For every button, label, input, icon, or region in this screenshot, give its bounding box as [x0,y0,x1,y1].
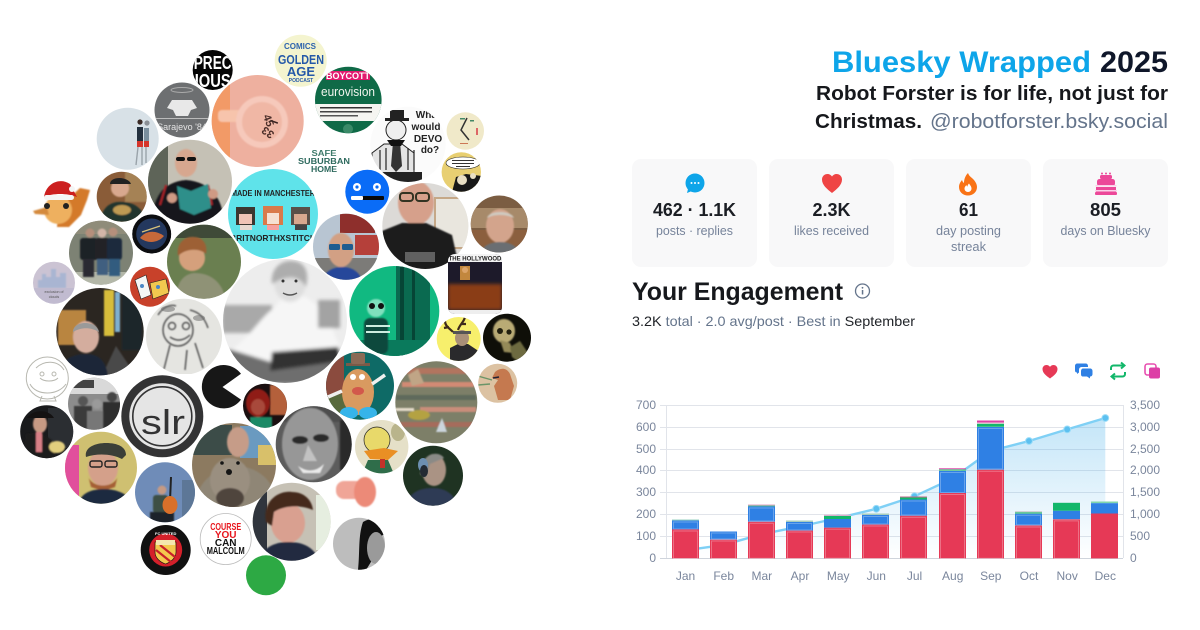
grid lines [660,405,1124,558]
bar May [824,515,851,558]
y axis left: 300 [636,485,656,499]
x axis months [676,569,1116,583]
avatar: pencil caricature [146,298,222,374]
avatar: city poster: clouds [49,295,59,299]
y axis right: 2,500 [1130,442,1160,456]
heading: your engagement: Your Engagement [632,278,844,306]
x axis months: Mar [751,569,772,583]
avatar: red hair selfie [242,383,288,429]
bar Dec [1091,502,1118,558]
avatar: pink peg [336,477,376,507]
avatar: sarajevo [154,82,210,138]
stat card: likes [769,159,894,267]
avatar: made in manchester pixels [226,167,320,261]
avatar: devo illustration [372,110,442,182]
avatar: slr logo [121,375,203,457]
y axis left: 500 [636,442,656,456]
avatar: three people [68,220,134,286]
avatar: green duotone [348,265,442,357]
avatar: sarajevo: Sarajevo '84 [157,122,207,132]
avatar: mission patch [132,214,171,254]
label: safe suburban home: HOME [311,165,338,174]
bar Nov [1053,503,1080,558]
avatar: devo illustration: would [411,122,440,133]
bar Jul [900,496,927,558]
tagline and handle: Christmas. [815,111,922,133]
title: 2025 [1100,46,1168,79]
y axis right: 500 [1130,529,1150,543]
avatar: the hollywood poster [448,254,502,314]
avatar: boy in field [166,224,242,300]
bar Mar [748,504,775,558]
avatar: peach mug: 45 [260,113,276,129]
avatar: blue robot face [345,170,389,214]
bar Jan [672,520,699,558]
avatar: the hollywood poster: THE HOLLYWOOD [449,256,502,262]
y axis right: 2,000 [1130,463,1160,477]
x axis months: Jun [867,569,886,583]
icon: cake [1095,172,1117,195]
stat card: likes: 2.3K [812,200,850,220]
icon: heart [822,174,842,193]
avatar: man with schnauzer [190,422,278,508]
y axis left: 600 [636,420,656,434]
avatar: clock sketch [446,112,484,150]
stat card: likes: likes received [794,224,869,238]
stat card: posts and replies: 462 · 1.1K [653,200,736,220]
stat card: streak [906,159,1031,267]
stat card: days on bluesky [1043,159,1168,267]
y axis left: 700 [636,398,656,412]
avatar: pacman [202,365,241,408]
avatar: comics golden age: AGE [287,64,315,79]
avatar: course you can malcolm: CAN [215,538,237,549]
avatar: black and white profile [332,517,386,571]
avatar: goldfish with santa hat [33,181,90,227]
stat card: posts and replies: posts · replies [656,224,733,238]
avatar: boycott eurovision [314,66,384,134]
avatar: popcorn man [20,405,74,459]
icon: legend quotes [1145,364,1160,378]
avatar: aerial crowd [394,360,478,444]
x axis months: Nov [1057,569,1078,583]
x axis months: Apr [791,569,809,583]
avatar: cartoon cheese [130,266,170,307]
avatar: monkey astronaut line drawing [26,357,68,401]
avatar: made in manchester pixels: BRITNORTHXSTITCH [230,233,316,243]
avatar: course you can malcolm: YOU [215,530,237,541]
label: safe suburban home: SUBURBAN [298,157,350,166]
avatar: course you can malcolm: MALCOLM [207,546,245,557]
avatar: headphones profile [402,445,464,507]
stat card: posts and replies [632,159,757,267]
avatar: precious: PREC [194,53,232,73]
stat card: streak: day posting [936,224,1001,238]
avatar: city poster: exclusion of [45,290,63,294]
bar Sep [977,420,1004,558]
avatar: boycott eurovision: eurovision [321,84,375,99]
avatar: green circle [246,555,286,595]
bar Apr [786,520,813,558]
stat card: days on bluesky: days on Bluesky [1060,224,1151,238]
cumulative area [686,418,1105,558]
avatar: man by bookshelves [470,195,530,254]
avatar: pale couple [96,107,160,171]
y axis left [636,398,656,565]
avatar: comics golden age: COMICS [284,42,317,51]
avatar: devo illustration: What [416,110,441,121]
bars [672,420,1118,558]
avatar: peach mug [210,74,306,168]
avatar: fc united badge: FC UNITED [155,531,176,536]
chart legend [1042,362,1160,380]
icon: legend replies [1075,364,1092,378]
x axis months: May [827,569,850,583]
avatar: smiling old man [274,404,354,484]
x axis months: Feb [713,569,734,583]
avatar: devo illustration: do? [421,145,439,156]
label: safe suburban home: SAFE [312,149,337,158]
avatar: man in neon street [56,288,144,376]
bar Jun [862,514,889,558]
title: Bluesky Wrapped [832,46,1091,79]
label: safe suburban home [298,149,350,174]
bar Feb [710,532,737,558]
stat card: days on bluesky: 805 [1090,200,1121,220]
x axis months: Jan [676,569,695,583]
avatar: man with antlers [436,317,482,362]
x axis months: Aug [942,569,963,583]
y axis right: 1,000 [1130,507,1160,521]
avatar: reader with book [146,138,234,226]
avatar: city poster [33,261,75,304]
tagline and handle [815,83,1168,133]
avatar: bird sketch [478,364,518,403]
avatar cluster [20,34,532,595]
icon: flame [959,173,977,196]
avatar: duck cartoon [354,419,410,475]
avatar: made in manchester pixels: MADE IN MANCHESTER [231,188,315,198]
avatar: skull [482,313,532,363]
y axis right: 1,500 [1130,485,1160,499]
avatar: young man [252,482,332,562]
icon: speech bubble [686,174,704,193]
avatar: comics golden age: GOLDEN [278,52,324,67]
avatar: slr logo: slr [141,404,185,442]
avatar: bearded man in flat cap [64,431,138,505]
avatar: precious [192,50,233,90]
avatar: boycott eurovision: BOYCOTT [326,71,371,81]
avatar: guitarist [134,461,196,524]
y axis right: 3,500 [1130,398,1160,412]
avatar: man in sunglasses [312,213,380,282]
avatar: comics golden age: PODCAST [289,78,313,84]
line markers [835,415,1109,521]
avatar: man in cap [96,171,149,223]
bar Oct [1015,511,1042,558]
y axis left: 0 [649,551,656,565]
avatar: fc united badge [141,525,191,575]
y axis left: 200 [636,507,656,521]
avatar: comic panel [442,152,481,192]
avatar: precious: IOUS [195,71,231,91]
x axis months: Jul [907,569,922,583]
chart: stacked monthly engagement [636,398,1160,583]
y axis left: 400 [636,463,656,477]
stat card: streak: 61 [959,200,978,220]
icon: legend reposts [1111,362,1125,380]
y axis right: 3,000 [1130,420,1160,434]
y axis left: 100 [636,529,656,543]
avatar: potato toy [326,352,394,420]
x axis months: Sep [980,569,1002,583]
icon: info [856,284,870,298]
icon: legend likes [1042,365,1058,378]
avatar: man with glasses in black tee [382,181,470,271]
tagline and handle: @robotforster.bsky.social [930,111,1168,133]
avatar: course you can malcolm [200,514,251,564]
avatar: black and white group [68,378,120,430]
avatar: comics golden age [274,34,328,88]
tagline and handle: Robot Forster is for life, not just for [816,83,1168,105]
avatar: large black and white woman [222,258,348,384]
bar Aug [939,468,966,558]
stat card: streak: streak [951,240,987,254]
y axis right [1130,398,1160,565]
avatar: course you can malcolm: COURSE [210,522,241,533]
engagement summary: 3.2K total · 2.0 avg/post · Best in September [632,313,915,329]
y axis right: 0 [1130,551,1137,565]
cumulative line [686,418,1105,550]
x axis months: Dec [1095,569,1116,583]
avatar: devo illustration: DEVO [414,134,442,145]
avatar: peach mug: 33 [260,124,277,140]
x axis months: Oct [1020,569,1039,583]
